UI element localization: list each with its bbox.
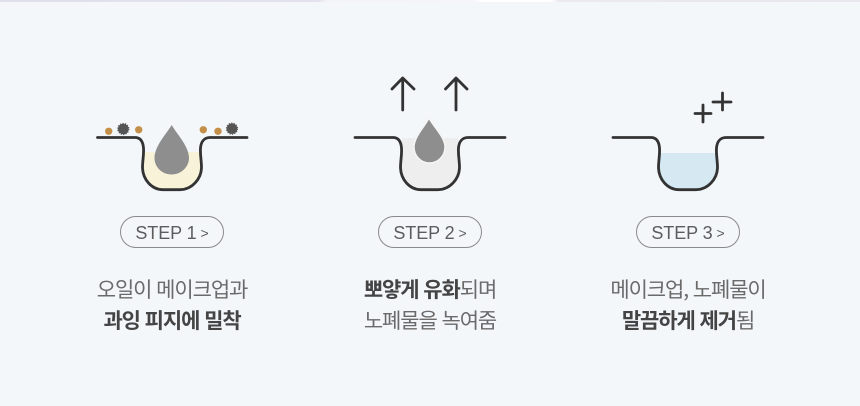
- step 3 badge: STEP 3 >: [651, 223, 725, 243]
- step 1 badge: [120, 216, 224, 248]
- oil drop: [154, 125, 189, 174]
- step 2 caption: [364, 274, 496, 335]
- emulsified fill: [400, 138, 460, 190]
- top edge strip: [0, 0, 860, 2]
- sparkle plus signs: [695, 93, 731, 122]
- makeup particles: [105, 123, 237, 135]
- step 2 badge: [378, 216, 482, 248]
- step 3 caption: 말끔하게 제거됨: [622, 305, 754, 335]
- step 1 caption: 과잉 피지에 밀착: [103, 305, 241, 335]
- step 2 caption: 뽀얗게 유화되며: [364, 274, 496, 304]
- skin pore outline: [355, 138, 505, 190]
- step 1 caption: [97, 274, 248, 335]
- clean water fill: [658, 153, 718, 190]
- step 3 caption: [610, 274, 766, 335]
- step 2 badge: STEP 2 >: [393, 223, 467, 243]
- step 3 caption: 메이크업, 노폐물이: [610, 274, 766, 304]
- oil fill: [142, 152, 202, 190]
- step 3 badge: [636, 216, 740, 248]
- skin pore outline: [98, 138, 247, 190]
- step 1 badge: STEP 1 >: [135, 223, 209, 243]
- skin pore outline: [613, 138, 763, 190]
- step 2 caption: 노폐물을 녹여줌: [364, 305, 496, 335]
- oil drop with halo: [414, 118, 445, 163]
- step 1 caption: 오일이 메이크업과: [97, 274, 247, 304]
- arrows up: [392, 78, 467, 110]
